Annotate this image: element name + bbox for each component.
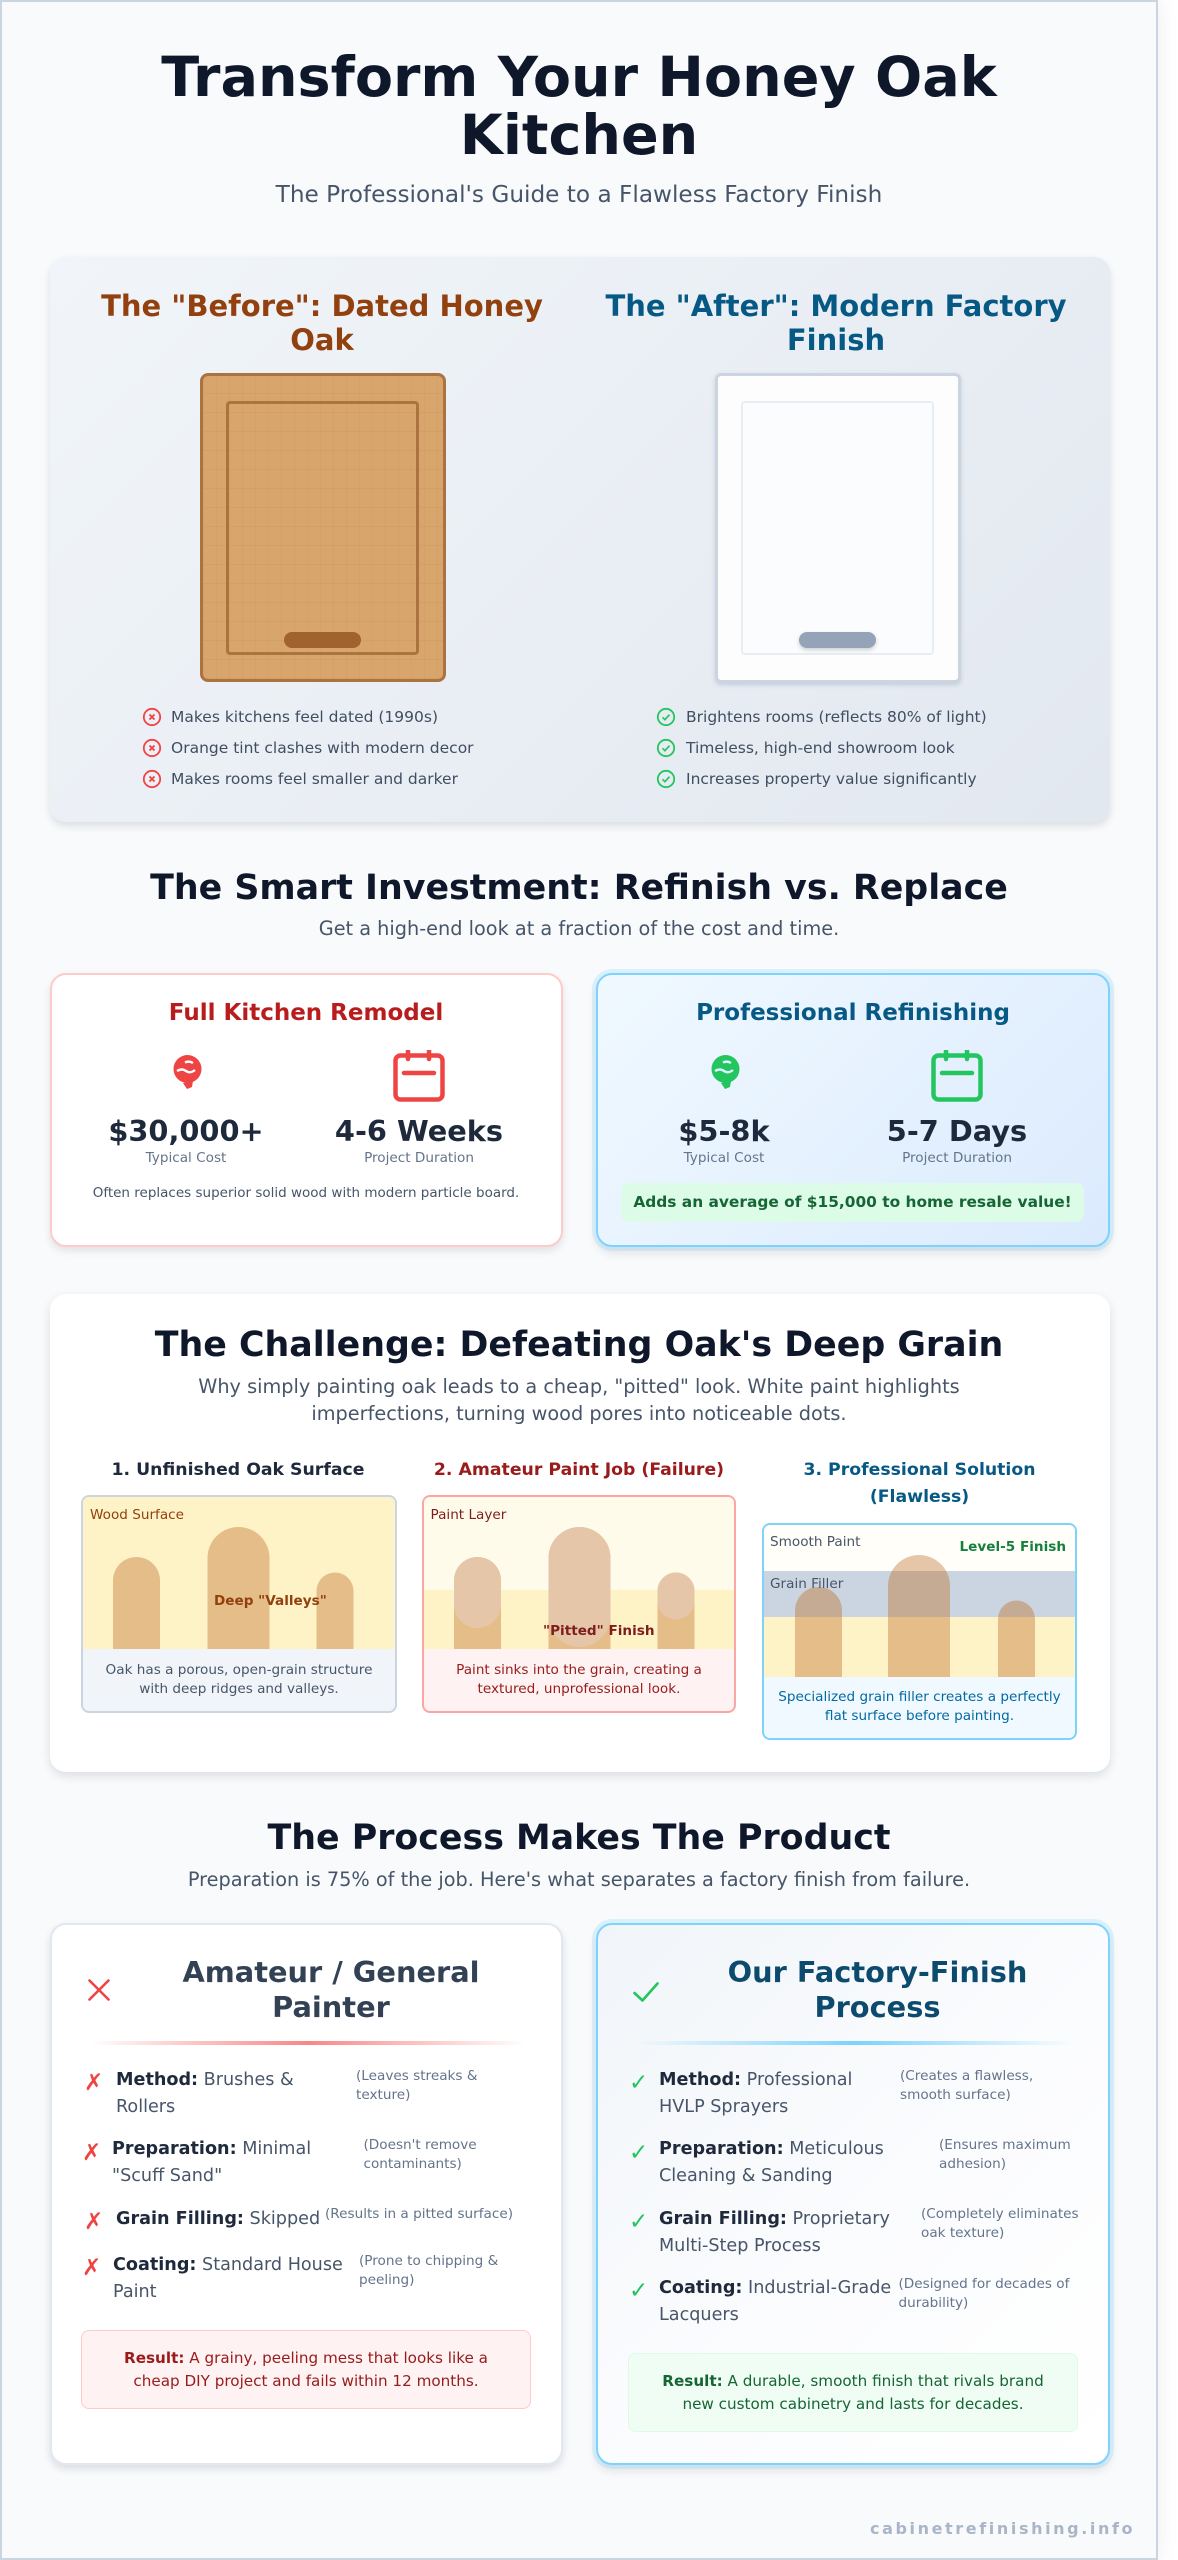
list item: grain filling [84, 2206, 513, 2235]
item note: (Ensures maximum [939, 2137, 1071, 2153]
heading: before: Oak [290, 323, 354, 357]
item text: Makes rooms feel smaller and darker [171, 770, 458, 788]
item text: Paint [113, 2282, 157, 2302]
item text: Method: Professional [659, 2070, 852, 2090]
item text [659, 2206, 890, 2260]
label: wood surface: Wood Surface [90, 1507, 184, 1523]
item note: (Leaves streaks & [356, 2068, 477, 2084]
illustration: wood pores [83, 1497, 395, 1649]
callout: resale value: Adds an average of $15,000 to home resale value! [633, 1193, 1072, 1211]
item text [659, 2275, 891, 2329]
list item: method [84, 2068, 477, 2117]
item text: Lacquers [659, 2305, 739, 2325]
inner panel: oak [226, 401, 419, 655]
mark: ✗ [82, 2140, 101, 2166]
list: before drawbacks [142, 708, 474, 788]
handle: oak [284, 632, 361, 648]
panel: factory-finish process [596, 1923, 1110, 2464]
card heading: Process [814, 1990, 940, 2024]
subheading: challenge: imperfections, turning wood pores into noticeable dots. [311, 1402, 847, 1424]
column title 3 [803, 1460, 1036, 1506]
panel: professional refinishing [596, 973, 1110, 1247]
subheading: process: Preparation is 75% of the job. Here's what separates a factory finish from failure. [188, 1868, 970, 1890]
card heading: Painter [272, 1990, 390, 2024]
card title: Full Kitchen Remodel [169, 1000, 443, 1026]
mark: ✗ [82, 2255, 101, 2281]
label: pitted finish: "Pitted" Finish [543, 1623, 655, 1639]
diagram: professional solution [762, 1522, 1077, 1740]
item text: Increases property value significantly [686, 770, 977, 788]
illustration: paint over pores [424, 1497, 734, 1649]
item note: smooth surface) [900, 2087, 1011, 2103]
result text [124, 2348, 488, 2390]
icon: cost [174, 1055, 202, 1089]
list item: coating [82, 2253, 498, 2302]
item text [116, 2070, 294, 2117]
handle: white [799, 632, 876, 648]
heading: challenge: The Challenge: Defeating Oak's Deep Grain [155, 1324, 1003, 1364]
card heading [728, 1954, 1027, 2024]
subheading: smart investment: Get a high-end look at a fraction of the cost and time. [319, 917, 839, 940]
item text: Grain Filling: Skipped [116, 2209, 320, 2229]
list item: coating [630, 2274, 1080, 2336]
result text: new custom cabinetry and lasts for decades. [682, 2394, 1024, 2412]
card heading: Our Factory-Finish [728, 1954, 1027, 1988]
heading: before [101, 289, 543, 357]
label: level-5 finish: Level-5 Finish [960, 1538, 1066, 1554]
footer: website: cabinetrefinishing.info [870, 2519, 1135, 2538]
caption: Specialized grain filler creates a perfectly [778, 1689, 1061, 1705]
result text: Result: A durable, smooth finish that rivals brand [662, 2372, 1044, 2390]
item text: Coating: Industrial-Grade [659, 2278, 891, 2298]
column title 1: 1. Unfinished Oak Surface [112, 1460, 364, 1480]
item note: texture) [356, 2087, 410, 2103]
card title: Professional Refinishing [696, 1000, 1010, 1026]
caption: Oak has a porous, open-grain structure [106, 1662, 372, 1678]
card heading: Amateur / General [182, 1954, 480, 1988]
icon: check circle [656, 738, 676, 758]
title [161, 45, 998, 168]
caption: flat surface before painting. [825, 1708, 1014, 1724]
stat label: Typical Cost [684, 1150, 764, 1166]
icon: check circle [656, 770, 676, 788]
list item: method [629, 2068, 1033, 2117]
item text: Coating: Standard House [113, 2255, 343, 2275]
heading: before: The "Before": Dated Honey [101, 289, 543, 323]
item text: Orange tint clashes with modern decor [171, 739, 474, 757]
inner panel: white [741, 401, 934, 655]
stat label: Project Duration [902, 1150, 1012, 1166]
item note [359, 2253, 498, 2288]
column title 3: (Flawless) [870, 1486, 969, 1506]
panel: amateur painter [50, 1923, 563, 2464]
item text: Preparation: Meticulous [659, 2139, 884, 2159]
subheading: challenge: Why simply painting oak leads to a cheap, "pitted" look. White paint highlights [198, 1374, 960, 1398]
heading: after [605, 289, 1067, 357]
caption [456, 1662, 702, 1696]
diagram: unfinished oak [81, 1495, 397, 1712]
item text: Method: Brushes & [116, 2070, 294, 2090]
caption: textured, unprofessional look. [478, 1680, 680, 1696]
item note [900, 2067, 1033, 2105]
stat: duration: 5-7 Days [887, 1114, 1027, 1148]
item note: adhesion) [939, 2156, 1006, 2172]
column title 3: 3. Professional Solution [803, 1460, 1036, 1480]
title: Kitchen [460, 103, 698, 168]
stat label: Typical Cost [146, 1150, 226, 1166]
caption: Paint sinks into the grain, creating a [456, 1662, 702, 1678]
stat label: Project Duration [364, 1150, 474, 1166]
result box [628, 2353, 1078, 2432]
cabinet door: honey oak [200, 373, 446, 682]
subtitle: The Professional's Guide to a Flawless Factory Finish [276, 181, 882, 208]
item text: Makes kitchens feel dated (1990s) [171, 708, 438, 726]
diagram: amateur paint [422, 1495, 736, 1712]
icon: calendar [931, 1050, 983, 1102]
heading: process: The Process Makes The Product [267, 1818, 891, 1858]
divider [90, 2041, 526, 2045]
column title 2: 2. Amateur Paint Job (Failure) [434, 1460, 724, 1480]
result text: Result: A grainy, peeling mess that looks like a [124, 2348, 488, 2366]
icon: check circle [656, 708, 676, 726]
callout: resale value [621, 1183, 1084, 1222]
caption [778, 1689, 1061, 1724]
item note [898, 2275, 1069, 2313]
item text: Timeless, high-end showroom look [686, 739, 955, 757]
item note: (Creates a flawless, [900, 2068, 1033, 2084]
title: Transform Your Honey Oak [161, 45, 997, 110]
result text: cheap DIY project and fails within 12 months. [133, 2372, 479, 2390]
item text: HVLP Sprayers [659, 2097, 788, 2117]
item note [921, 2205, 1079, 2243]
icon: x circle [142, 770, 162, 788]
panel: the challenge [50, 1294, 1110, 1772]
panel: full kitchen remodel [50, 973, 563, 1247]
list item: preparation [82, 2137, 477, 2186]
item text: Multi-Step Process [659, 2236, 821, 2256]
item note [356, 2068, 477, 2103]
mark: ✗ [84, 2209, 103, 2235]
result box [81, 2330, 531, 2409]
item text: Cleaning & Sanding [659, 2166, 833, 2186]
item note: oak texture) [921, 2225, 1004, 2241]
item note: contaminants) [364, 2156, 462, 2172]
icon: cost [712, 1055, 740, 1089]
label: grain filler: Grain Filler [770, 1576, 843, 1592]
stat: cost: $5-8k [678, 1114, 770, 1148]
item text: Preparation: Minimal [112, 2139, 311, 2159]
item note: (Results in a pitted surface) [325, 2206, 513, 2222]
item text [659, 2070, 852, 2117]
list: after benefits [656, 708, 987, 788]
item text: "Scuff Sand" [112, 2166, 222, 2186]
mark: ✓ [629, 2209, 648, 2235]
list item: grain filling [630, 2204, 1080, 2266]
item note: (Completely eliminates [921, 2206, 1079, 2222]
illustration: grain filler layers [764, 1525, 1075, 1677]
item text: Brightens rooms (reflects 80% of light) [686, 708, 987, 726]
mark: ✓ [629, 2140, 648, 2166]
icon: calendar [393, 1050, 445, 1102]
result text [629, 2370, 1077, 2416]
cabinet door: white finish [714, 373, 960, 683]
item note: (Doesn't remove [364, 2137, 477, 2153]
item note: peeling) [359, 2272, 414, 2288]
mark: ✓ [629, 2070, 648, 2096]
caption: with deep ridges and valleys. [139, 1680, 339, 1696]
card heading [182, 1954, 480, 2024]
stat: cost: $30,000+ [108, 1114, 264, 1148]
mark: ✓ [629, 2278, 648, 2304]
subheading: challenge [198, 1374, 960, 1424]
icon: check [633, 1982, 659, 2002]
mark: ✗ [84, 2070, 103, 2096]
item text: Grain Filling: Proprietary [659, 2209, 890, 2229]
heading: after: The "After": Modern Factory [605, 289, 1067, 323]
item text [112, 2139, 311, 2186]
item text: Rollers [116, 2097, 175, 2117]
label: smooth paint: Smooth Paint [770, 1534, 860, 1550]
icon: x [88, 1979, 110, 2001]
divider [635, 2041, 1074, 2045]
card note: Often replaces superior solid wood with modern particle board. [93, 1185, 519, 1201]
item note: (Designed for decades of [898, 2276, 1069, 2292]
item note: (Prone to chipping & [359, 2253, 498, 2269]
label: deep valleys: Deep "Valleys" [214, 1593, 327, 1609]
list item: preparation [630, 2135, 1080, 2197]
panel: before and after [50, 257, 1110, 822]
item note [364, 2137, 477, 2172]
heading: smart investment: The Smart Investment: Refinish vs. Replace [150, 868, 1008, 908]
item note: durability) [898, 2295, 968, 2311]
stat: duration: 4-6 Weeks [335, 1114, 503, 1148]
item note [939, 2136, 1071, 2174]
item text [659, 2136, 884, 2190]
item text [113, 2255, 343, 2302]
icon: x circle [142, 708, 162, 726]
icon: x circle [142, 738, 162, 758]
label: paint layer: Paint Layer [430, 1507, 506, 1523]
heading: after: Finish [787, 323, 885, 357]
caption [106, 1662, 372, 1696]
